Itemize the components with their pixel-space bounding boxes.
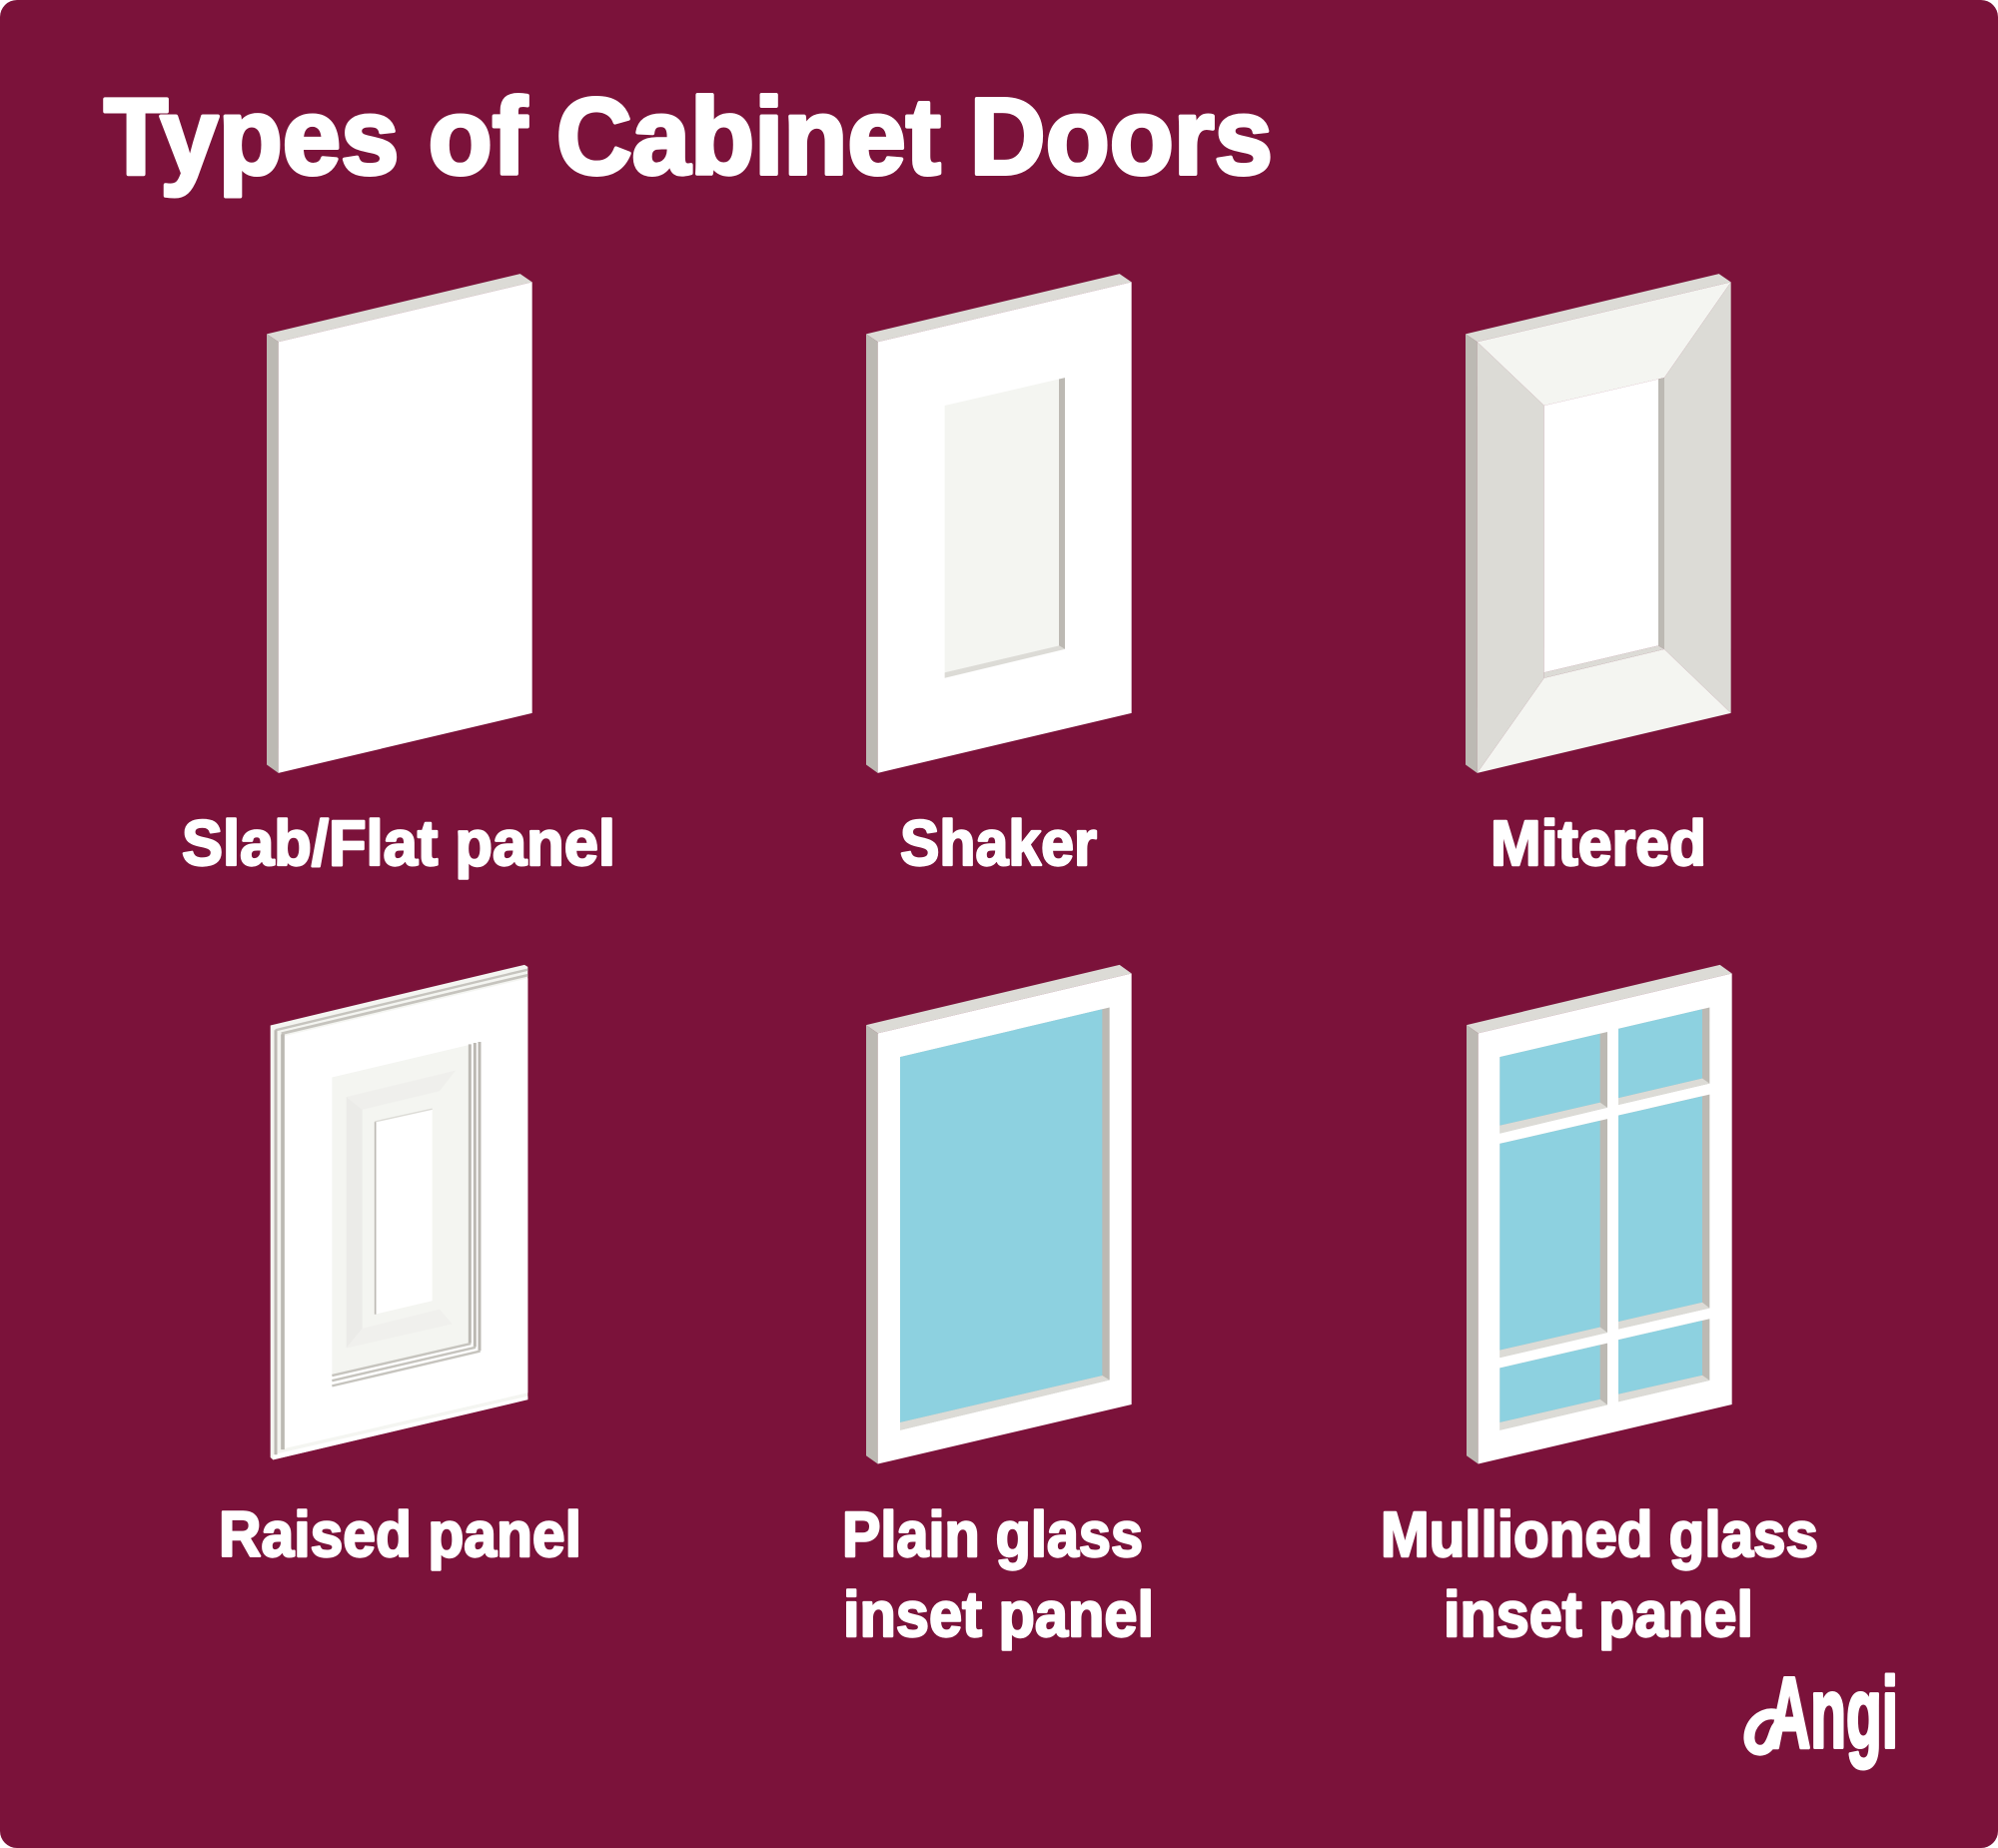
label: plain glass inset panel [842, 1498, 1154, 1650]
label: mullioned glass inset panel: inset panel [1444, 1578, 1753, 1650]
door: mullioned glass inset panel [1467, 965, 1732, 1464]
label: shaker: Shaker [900, 807, 1097, 879]
logo: Angi: Angi [1768, 1657, 1898, 1769]
label: mullioned glass inset panel: Mullioned glass [1381, 1498, 1818, 1570]
door: slab flat panel [267, 274, 532, 773]
door: plain glass inset panel [866, 965, 1132, 1464]
label: mitered: Mitered [1491, 807, 1706, 879]
label: plain glass inset panel: inset panel [843, 1578, 1154, 1650]
label: mullioned glass inset panel [1381, 1498, 1818, 1650]
logo: Angi [1749, 1657, 1898, 1769]
title: Types of Cabinet Doors [104, 76, 1273, 198]
label: slab flat panel: Slab/Flat panel [182, 807, 615, 879]
door: raised panel [271, 965, 527, 1459]
door: shaker [866, 274, 1132, 773]
label: plain glass inset panel: Plain glass [842, 1498, 1143, 1570]
label: raised panel: Raised panel [219, 1498, 581, 1570]
door: mitered [1466, 274, 1731, 773]
